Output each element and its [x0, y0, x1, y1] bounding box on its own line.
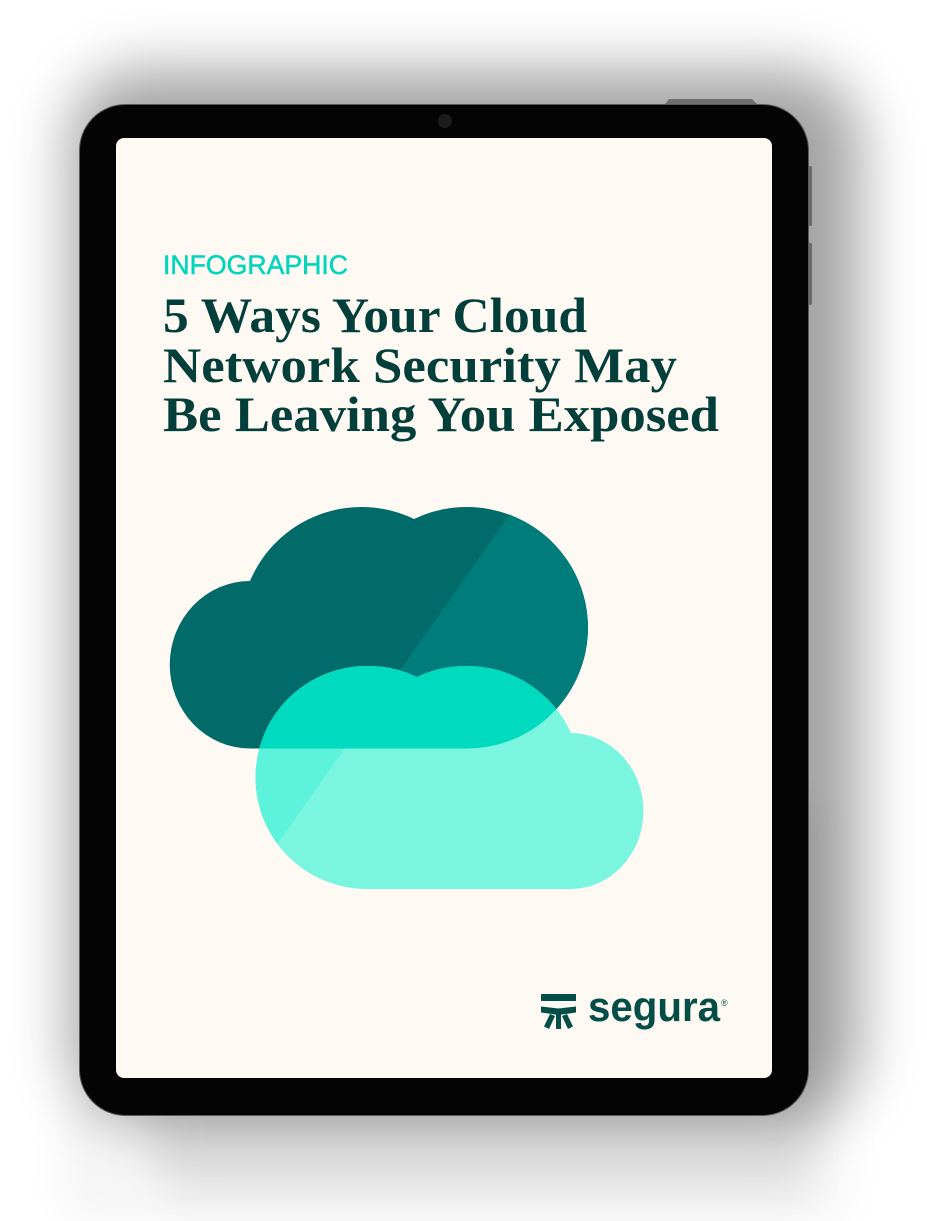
title: 5 Ways Your Cloud	[163, 287, 587, 343]
top button	[664, 99, 758, 105]
eyebrow label: INFOGRAPHIC	[163, 250, 348, 280]
tablet body	[80, 99, 812, 1116]
side buttons	[806, 166, 812, 305]
icon: overlapping clouds	[160, 500, 650, 895]
camera	[438, 114, 452, 128]
logo: segura	[541, 983, 728, 1030]
logo wordmark: segura	[588, 983, 721, 1030]
screen	[116, 138, 772, 1078]
screen background	[116, 138, 772, 1078]
title	[163, 287, 719, 442]
logo mark	[541, 994, 576, 1029]
title: Network Security May	[163, 337, 677, 393]
bezel	[80, 104, 808, 1116]
registered mark: ®	[721, 998, 728, 1008]
dark cloud	[170, 507, 588, 748]
title: Be Leaving You Exposed	[163, 386, 719, 442]
light cloud	[250, 660, 650, 895]
cloud overlap	[259, 666, 556, 748]
